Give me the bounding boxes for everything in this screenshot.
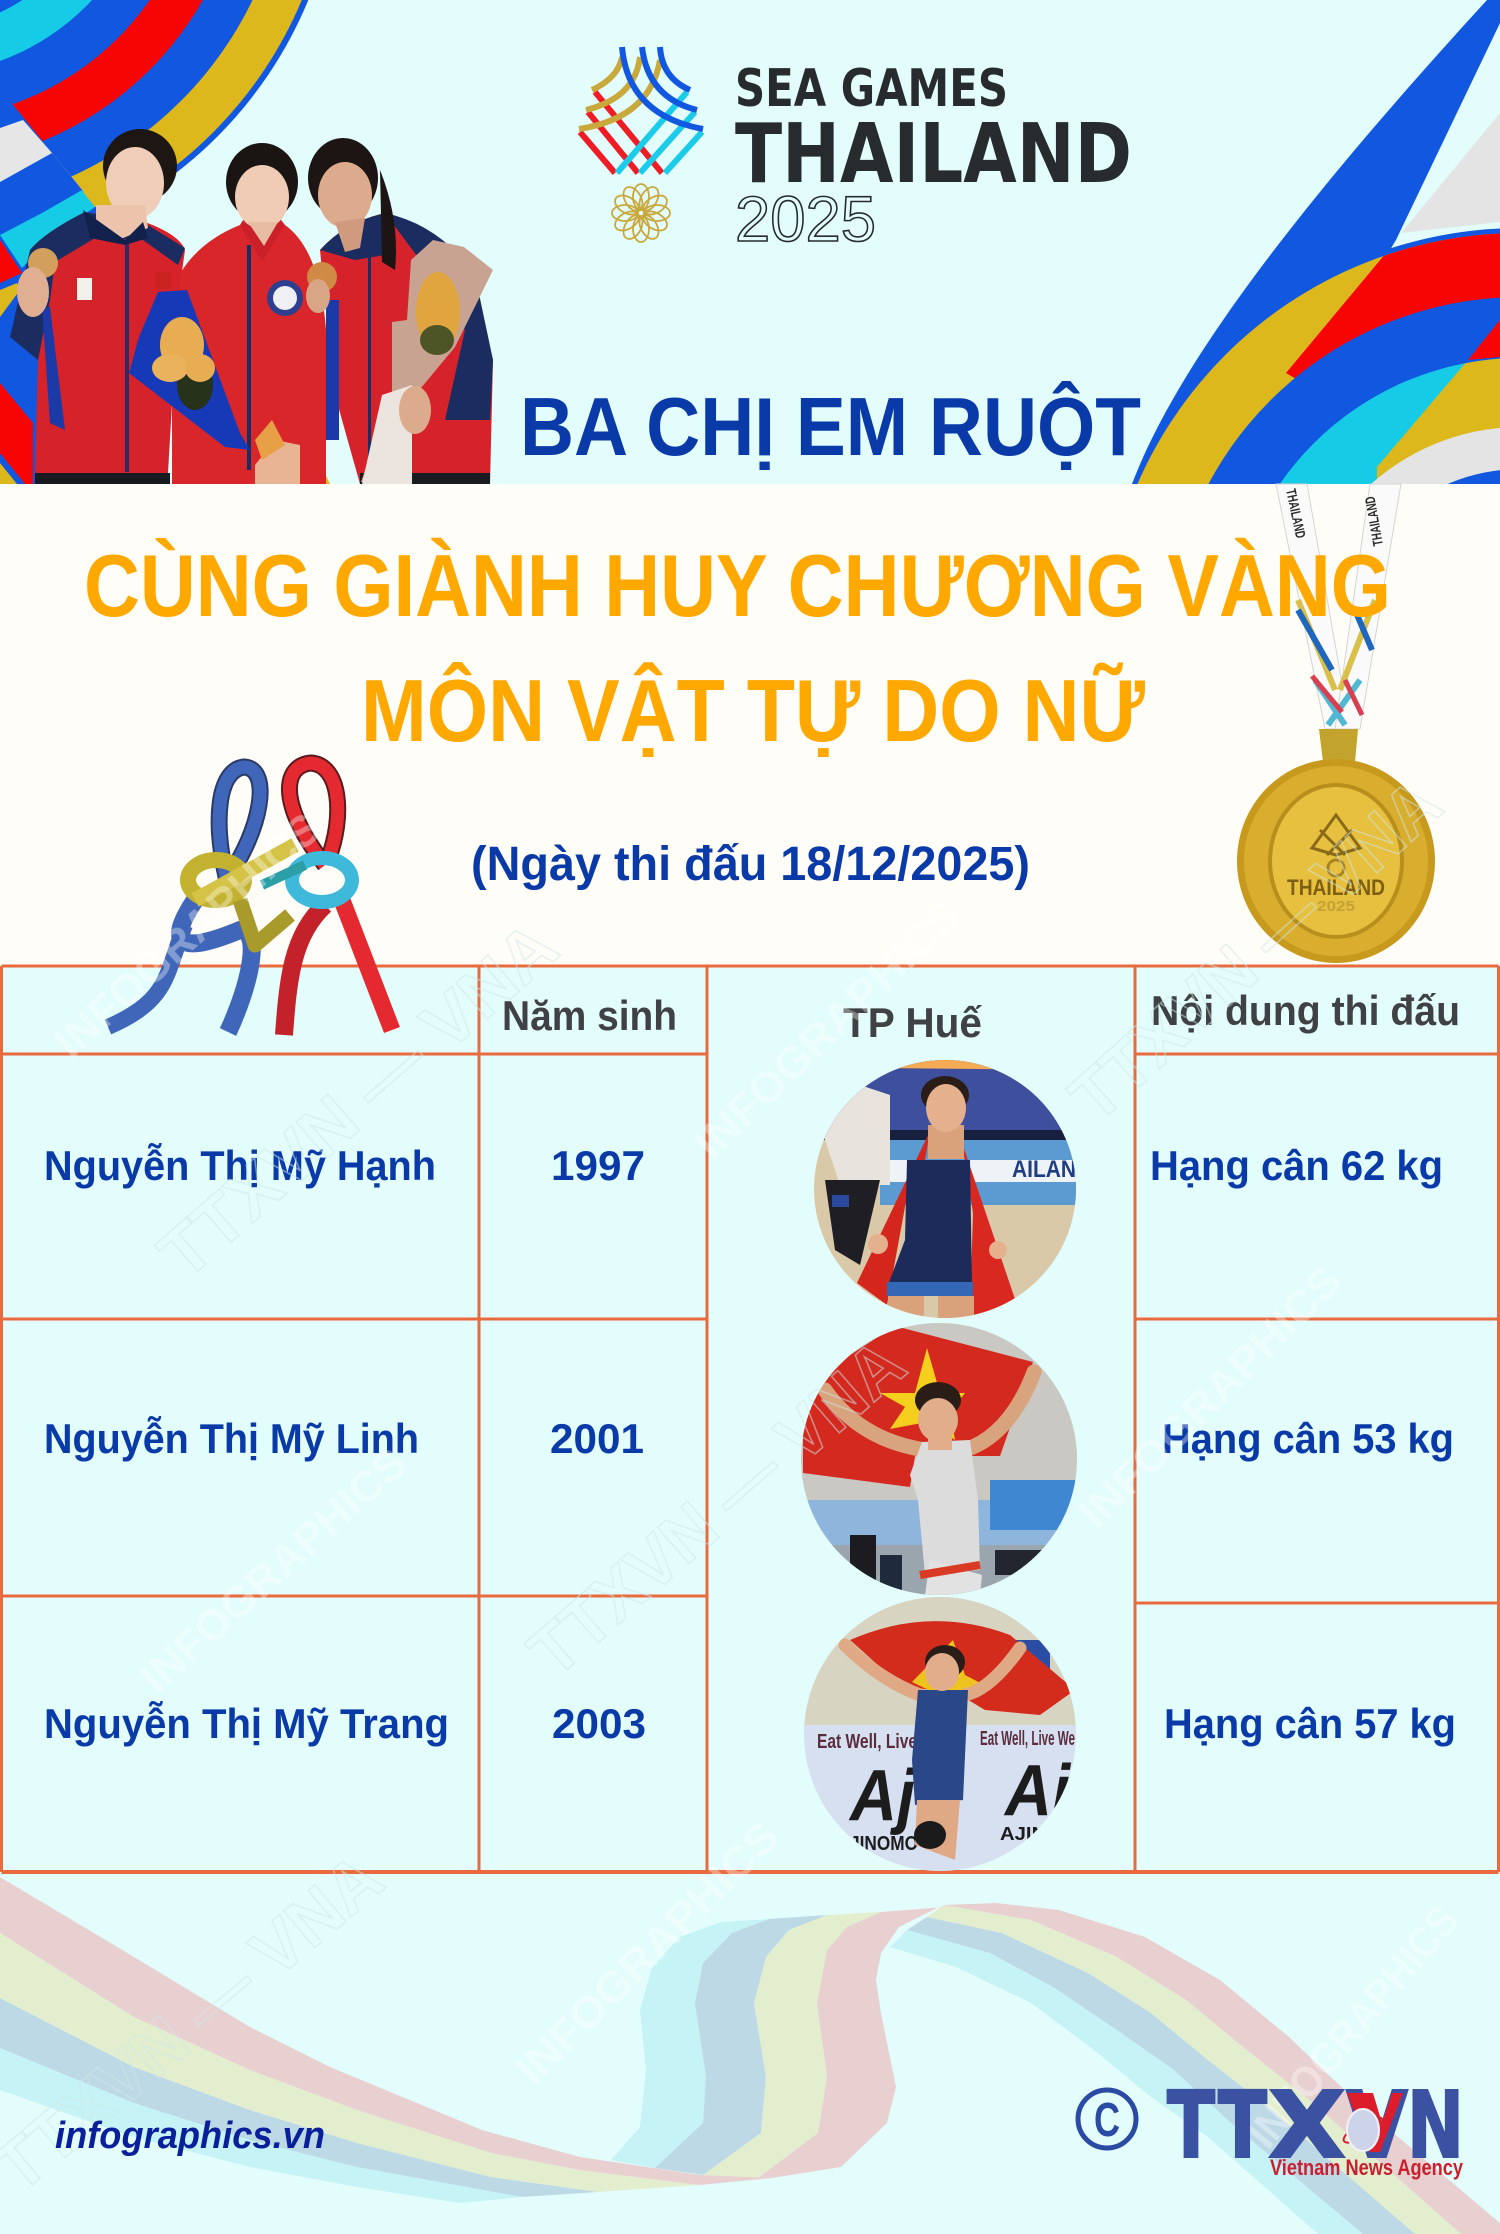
globe mark [1340, 2093, 1403, 2152]
banner text: Eat Well, Live [817, 1731, 917, 1753]
medal with ribbon: 2025 [1317, 898, 1355, 915]
header: birth year: Năm sinh [502, 992, 677, 1039]
row: Nguyen Thi My Hanh: Hạng cân 62 kg [1150, 1142, 1443, 1189]
copyright symbol [1078, 2090, 1136, 2148]
header: Hue city: TP Huế [843, 999, 983, 1046]
clasp [1319, 729, 1358, 762]
agency tagline: Vietnam News Agency [1270, 2155, 1464, 2180]
wrestler arms [825, 1372, 1034, 1450]
photo: Nguyen Thi My Trang: AJINO [1000, 1824, 1062, 1844]
wrestler arms [845, 1645, 1020, 1695]
blue bouquet [129, 290, 250, 450]
medal with ribbon: THAILAND [1287, 875, 1385, 900]
heading: three sisters: BA CHỊ EM RUỘT [520, 380, 1141, 473]
TTXVN wordmark: X [1268, 2072, 1346, 2179]
ribbon: THAILAND [1283, 487, 1309, 540]
table grid [2, 966, 1498, 1872]
photo: Nguyen Thi My Hanh [810, 1055, 1080, 1325]
red belt [284, 763, 392, 1035]
row: Nguyen Thi My Trang: Hạng cân 57 kg [1164, 1700, 1456, 1747]
decorative rainbow top left [0, 0, 340, 484]
outlined agency watermarks: TTXVN — VNA [514, 1324, 920, 1691]
photo: three sisters with medals and bouquets [10, 129, 493, 484]
row: Nguyen Thi My Hanh [44, 1141, 1443, 1189]
row: Nguyen Thi My Trang [44, 1699, 1456, 1747]
SEA Games Thailand 2025 logo [579, 47, 1132, 255]
row: Nguyen Thi My Linh: Hạng cân 53 kg [1162, 1415, 1454, 1462]
photo: Nguyen Thi My Linh [800, 1320, 1080, 1600]
medal disc [1237, 759, 1435, 963]
athlete right [306, 138, 493, 484]
outlined agency watermarks [0, 764, 1456, 2206]
decorative rainbow top right [1132, 0, 1500, 484]
gold flower [612, 184, 670, 242]
copyright symbol: C [1094, 2094, 1120, 2147]
TTXVN wordmark: T [1218, 2072, 1267, 2179]
referee [824, 1086, 890, 1185]
decorative ribbon bottom [0, 1877, 1500, 2234]
flag [850, 1621, 1075, 1715]
TTXVN wordmark: V [1346, 2072, 1408, 2179]
watermarks: INFOGRAPHICS [685, 890, 971, 1168]
pink bouquet [361, 240, 493, 484]
row: Nguyen Thi My Hanh: Nguyễn Thị Mỹ Hạnh [44, 1141, 436, 1189]
TTXVN wordmark [1167, 2072, 1464, 2179]
title band background [0, 484, 1500, 966]
ribbon rising section [611, 1903, 996, 2178]
ribbon right descending section [890, 1903, 1500, 2234]
wrestler body [912, 1690, 968, 1805]
outlined agency watermarks: TTXVN — VNA [144, 906, 572, 1293]
blue diagonal band [1132, 0, 1500, 484]
ribbon left descending section [0, 1877, 772, 2203]
watermarks: INFOGRAPHICS [506, 1812, 789, 2094]
logo mark [579, 47, 703, 173]
photo: Nguyen Thi My Trang: Aj [1003, 1751, 1072, 1831]
SEA Games Thailand 2025 logo: 2025 [735, 183, 876, 255]
watermarks: INFOGRAPHICS [45, 804, 330, 1067]
yellow knot [188, 845, 295, 945]
flag cape [857, 1131, 930, 1305]
SEA Games Thailand 2025 logo: THAILAND [735, 107, 1132, 202]
heading: gold medal line 2: MÔN VẬT TỰ DO NỮ [361, 661, 1145, 760]
row: Nguyen Thi My Trang: 2003 [552, 1700, 646, 1747]
watermarks: INFOGRAPHICS [1238, 1896, 1468, 2157]
flag [803, 1326, 1033, 1487]
photo: Nguyen Thi My Trang: Aj [848, 1756, 917, 1836]
competition date: (Ngày thi đấu 18/12/2025) [471, 838, 1030, 891]
athlete left [10, 129, 185, 484]
row: Nguyen Thi My Linh: 2001 [550, 1415, 644, 1462]
ribbon [1276, 484, 1401, 729]
source website: infographics.vn [55, 2115, 325, 2157]
ribbon: THAILAND [1362, 495, 1386, 547]
row: Nguyen Thi My Trang: Nguyễn Thị Mỹ Trang [44, 1699, 449, 1747]
watermarks: INFOGRAPHICS [1069, 1256, 1352, 1538]
copyright and agency logo [1078, 2072, 1464, 2180]
logo wordmark: SEA GAMES [735, 59, 1008, 119]
medal with ribbon [1237, 484, 1435, 963]
watermarks: INFOGRAPHICS [131, 1439, 416, 1702]
blue belt [108, 767, 260, 1032]
star [880, 1348, 965, 1440]
photo: Nguyen Thi My Trang: Eat Well, Live We [980, 1728, 1075, 1750]
athlete middle [172, 143, 326, 484]
photo: Nguyen Thi My Hanh: AILAN [1012, 1156, 1076, 1183]
TTXVN wordmark: N [1407, 2072, 1464, 2179]
icon: wrestling belts knot [108, 763, 392, 1035]
cyan knot [262, 858, 352, 902]
outlined agency watermarks: TTXVN — VNA [1055, 764, 1456, 1136]
results table [2, 966, 1498, 1872]
wrestler [888, 1160, 972, 1285]
TTXVN wordmark: T [1167, 2072, 1215, 2179]
watermarks [45, 804, 1468, 2157]
photo: Nguyen Thi My Trang [800, 1595, 1080, 1875]
row: Nguyen Thi My Hanh: 1997 [551, 1142, 645, 1189]
photo: Nguyen Thi My Trang: JINOMO [850, 1833, 918, 1855]
header: event: Nội dung thi đấu [1151, 987, 1460, 1034]
row: Nguyen Thi My Linh: Nguyễn Thị Mỹ Linh [44, 1414, 419, 1462]
row: Nguyen Thi My Linh [44, 1414, 1454, 1462]
wrestler body [910, 1440, 980, 1575]
